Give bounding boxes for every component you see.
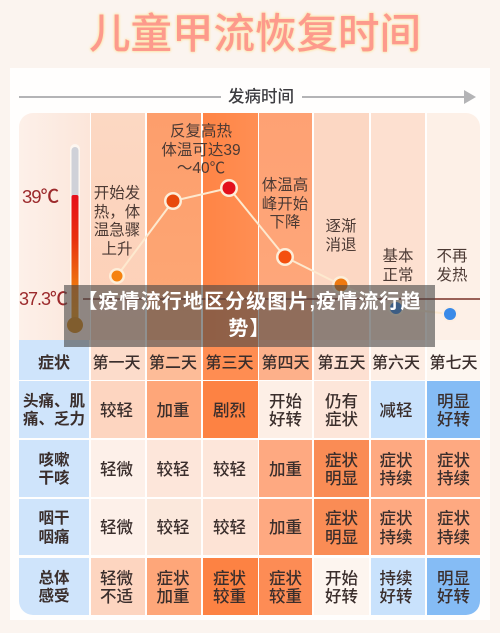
row: sore throat: 加重 — [269, 519, 302, 537]
row: overall feeling: 感受 — [38, 588, 70, 605]
text: day 4 fever note — [262, 176, 308, 231]
text: day 2-3 fever note: 反复高热 — [170, 123, 232, 140]
title: 儿童甲流恢复时间 — [89, 10, 421, 57]
panel: temperature chart background — [19, 113, 480, 340]
row: overall feeling: 较重 — [213, 588, 246, 606]
text: day 6 fever note: 正常 — [382, 267, 414, 284]
row: overall feeling: 症状 — [269, 570, 302, 588]
row: cough: 较轻 — [213, 461, 246, 479]
header row: 第五天 — [317, 355, 366, 372]
row: sore throat: 持续 — [437, 528, 470, 546]
row: cough: 明显 — [325, 470, 358, 488]
header row: 第六天 — [372, 355, 420, 372]
row: overall feeling: 加重 — [156, 588, 190, 606]
header row: 第一天 — [92, 355, 140, 372]
text: day 2-3 fever note: 体温可达39 — [161, 142, 241, 159]
row: cough: 加重 — [269, 461, 302, 479]
row: overall feeling: 症状 — [213, 570, 246, 588]
row: headache, muscle pain, fatigue: 症状 — [325, 411, 358, 429]
row: overall feeling: 好转 — [437, 588, 470, 606]
header row: 第三天 — [205, 355, 254, 372]
row: sore throat: 症状 — [325, 510, 358, 528]
row: headache, muscle pain, fatigue: 较轻 — [100, 402, 133, 420]
axis: onset time arrow — [19, 88, 476, 106]
header row: 第二天 — [149, 355, 197, 372]
row: overall feeling: 不适 — [100, 588, 133, 606]
row: sore throat: 咽干 — [38, 510, 70, 527]
text: day 1 fever note: 热，体 — [94, 204, 140, 221]
row: overall feeling: 明显 — [437, 570, 470, 588]
row: cough: 症状 — [325, 452, 358, 470]
row: overall feeling: 较重 — [269, 588, 302, 606]
row: headache, muscle pain, fatigue: 减轻 — [380, 402, 412, 420]
overlay caption banner: 势】 — [228, 318, 271, 340]
text: day 2-3 fever note — [161, 122, 241, 177]
row: headache, muscle pain, fatigue: 头痛、肌 — [23, 392, 85, 410]
text: day 5 fever note: 逐渐 — [325, 218, 357, 235]
axis: onset time arrow: 发病时间 — [228, 88, 294, 106]
text: day 1 fever note: 开始发 — [94, 185, 140, 202]
row: sore throat — [19, 499, 480, 555]
row: cough: 持续 — [380, 470, 412, 488]
row: cough: 干咳 — [38, 470, 70, 487]
header row: 第七天 — [429, 355, 478, 372]
text: day 6 fever note — [382, 248, 414, 284]
text: day 4 fever note: 下降 — [269, 214, 301, 231]
row: sore throat: 较轻 — [213, 519, 246, 537]
row: overall feeling: 好转 — [380, 588, 412, 606]
row: overall feeling: 开始 — [325, 570, 358, 588]
row: sore throat: 咽痛 — [38, 528, 70, 546]
row: headache, muscle pain, fatigue: 好转 — [269, 411, 302, 429]
row: cough: 症状 — [437, 452, 470, 470]
icon: thermometer — [67, 144, 83, 333]
row: sore throat: 轻微 — [100, 519, 133, 537]
row: overall feeling: 症状 — [156, 570, 190, 588]
text: day 4 fever note: 体温高 — [262, 177, 308, 194]
row: sore throat: 持续 — [380, 528, 412, 546]
label: 37.3 degrees: 37.3℃ — [19, 289, 67, 309]
text: day 7 fever note: 不再 — [436, 248, 468, 265]
overlay caption banner: 【疫情流行地区分级图片,疫情流行趋 — [77, 291, 422, 313]
row: headache, muscle pain, fatigue — [19, 381, 480, 438]
table: symptoms by day — [19, 340, 480, 615]
row: cough: 持续 — [437, 470, 470, 488]
row: cough: 轻微 — [100, 461, 133, 479]
overlay caption banner — [64, 285, 435, 347]
label: 39 degrees: 39℃ — [22, 186, 58, 207]
row: headache, muscle pain, fatigue: 好转 — [437, 411, 470, 429]
row: overall feeling: 持续 — [380, 570, 412, 588]
row: headache, muscle pain, fatigue: 剧烈 — [213, 402, 246, 420]
row: overall feeling: 好转 — [325, 588, 358, 606]
text: day 1 fever note: 上升 — [101, 241, 133, 258]
text: day 5 fever note: 消退 — [325, 237, 357, 254]
header row: 第四天 — [261, 355, 310, 372]
header row: 症状 — [38, 355, 70, 372]
row: cough: 咳嗽 — [38, 452, 70, 468]
row: headache, muscle pain, fatigue: 仍有 — [325, 392, 358, 410]
row: sore throat: 症状 — [380, 510, 412, 528]
text: day 1 fever note — [94, 184, 140, 258]
text: day 4 fever note: 峰开始 — [262, 196, 308, 213]
row: sore throat: 较轻 — [156, 519, 190, 537]
text: day 2-3 fever note: ～40℃ — [177, 160, 225, 177]
header row — [19, 340, 480, 380]
row: headache, muscle pain, fatigue: 加重 — [156, 402, 190, 420]
row: cough — [19, 440, 480, 497]
text: day 7 fever note: 发热 — [436, 267, 468, 284]
text: day 6 fever note: 基本 — [382, 248, 414, 265]
row: overall feeling: 轻微 — [100, 570, 133, 588]
text: day 1 fever note: 温急骤 — [94, 222, 140, 239]
row: headache, muscle pain, fatigue: 开始 — [269, 392, 302, 410]
row: cough: 较轻 — [156, 461, 190, 479]
row: sore throat: 明显 — [325, 528, 358, 546]
row: overall feeling: 总体 — [38, 570, 70, 586]
row: overall feeling — [19, 558, 480, 615]
text: day 5 fever note — [325, 218, 357, 254]
row: cough: 症状 — [380, 452, 412, 470]
row: sore throat: 症状 — [437, 510, 470, 528]
text: day 7 fever note — [436, 248, 468, 284]
row: headache, muscle pain, fatigue: 明显 — [437, 392, 470, 410]
row: headache, muscle pain, fatigue: 痛、乏力 — [23, 411, 85, 428]
